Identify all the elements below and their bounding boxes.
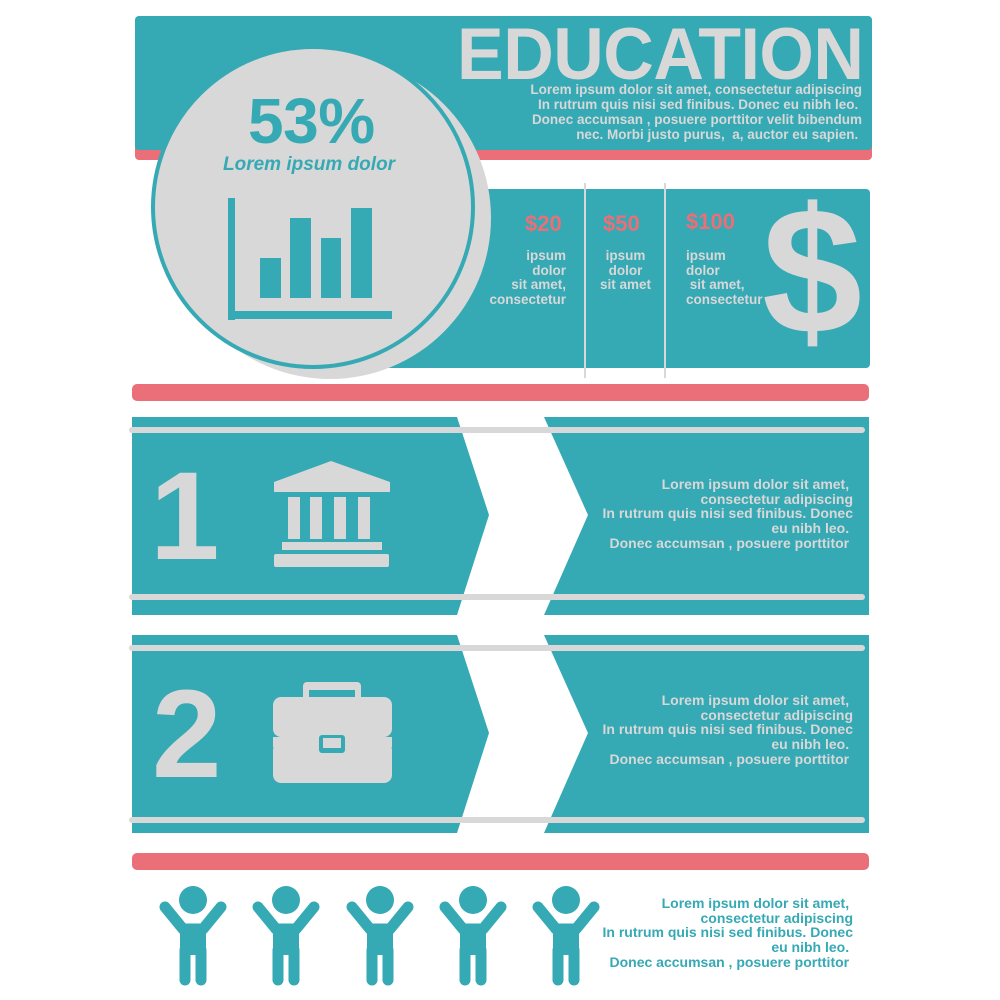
text: ipsum dolor sit amet, consectetur [686, 248, 763, 306]
icon: bank [274, 461, 390, 567]
band 1 [132, 417, 869, 615]
number 1: 1 [150, 447, 220, 586]
pink divider 2 [132, 853, 869, 870]
header pink underline [135, 140, 872, 160]
icons: people [165, 886, 594, 980]
bottom text: Lorem ipsum dolor sit amet, consectetur adipiscing In rutrum quis nisi sed finibus. Donec eu nibh leo. Donec accumsan , posuere porttitor [603, 895, 853, 970]
circle [153, 47, 473, 367]
price $100: $100 [686, 209, 735, 234]
title: EDUCATION [457, 13, 863, 95]
icon: briefcase [273, 682, 392, 783]
price panel [380, 189, 870, 368]
icon: bar chart [228, 198, 392, 320]
text: ipsum dolor sit amet, consectetur [489, 248, 566, 306]
icon: dollar: $ [762, 171, 862, 372]
dividers [584, 183, 586, 378]
number 2: 2 [152, 665, 222, 804]
pink divider 1 [132, 384, 869, 401]
stat 53%: 53% [248, 85, 375, 157]
band 2 [132, 635, 869, 833]
price $50: $50 [603, 211, 640, 236]
circle shadow [169, 57, 491, 379]
text: ipsum dolor sit amet [600, 248, 651, 292]
price $20: $20 [525, 211, 562, 236]
band 2 text: Lorem ipsum dolor sit amet, consectetur adipiscing In rutrum quis nisi sed finibus. Donec eu nibh leo. Donec accumsan , posuere porttitor [603, 692, 853, 767]
band 1 text: Lorem ipsum dolor sit amet, consectetur adipiscing In rutrum quis nisi sed finibus. Donec eu nibh leo. Donec accumsan , posuere porttitor [603, 476, 853, 551]
stat caption: Lorem ipsum dolor [223, 154, 395, 175]
header panel [135, 16, 872, 150]
header text: Lorem ipsum dolor sit amet, consectetur adipiscing In rutrum quis nisi sed finibus. Donec eu nibh leo. Donec accumsan , posuere porttitor velit bibendum nec. Morbi justo purus, a, auctor eu sapien. [530, 82, 862, 142]
